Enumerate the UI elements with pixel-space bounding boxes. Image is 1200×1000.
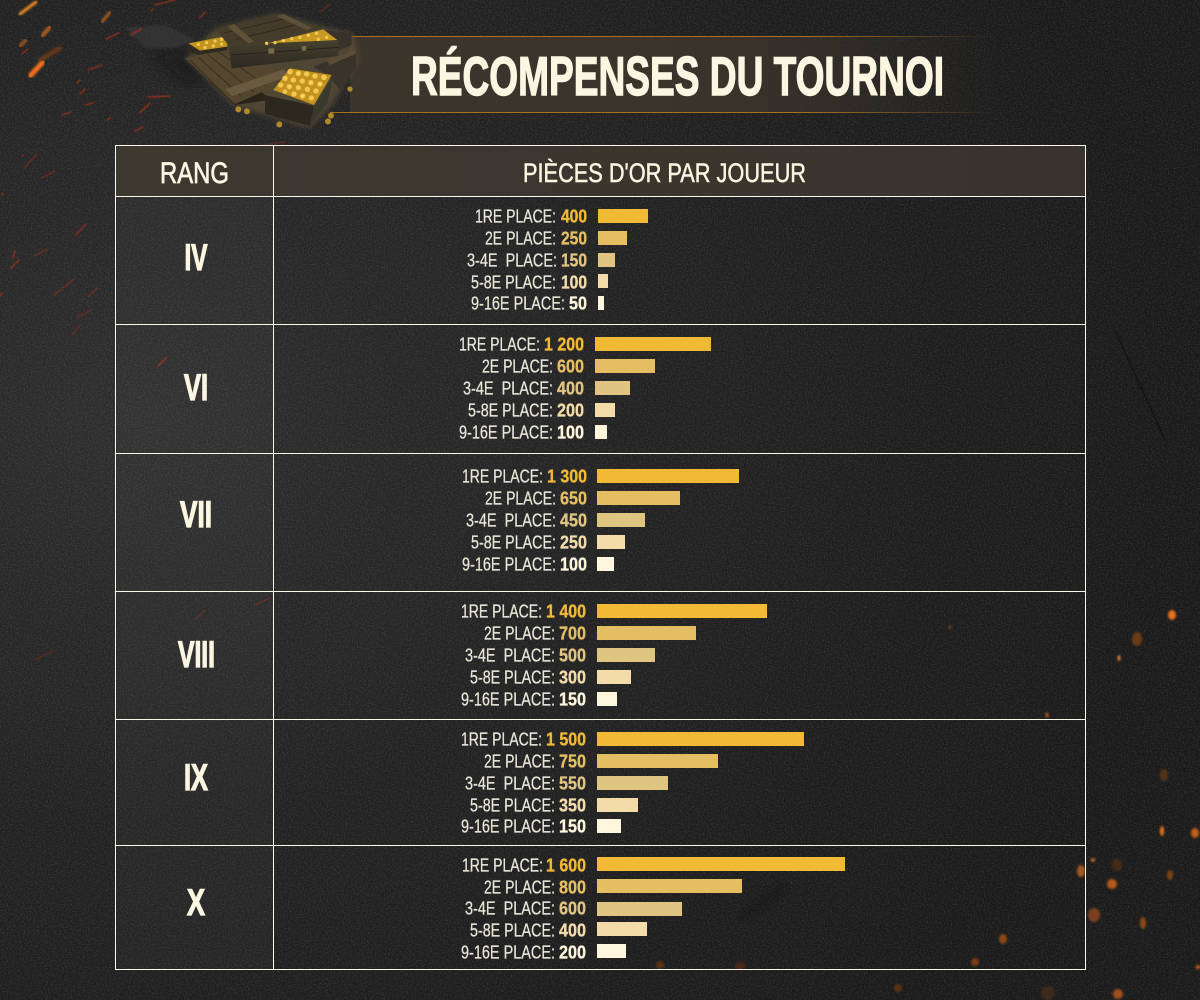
bar chart: rank IV: 150: [561, 250, 587, 270]
rank IV row: [184, 206, 648, 314]
bar chart: rank IV: [467, 206, 648, 314]
bar chart: rank X: 9-16E PLACE:: [461, 942, 555, 962]
bar chart: rank IX: 1 500: [546, 730, 586, 750]
bar chart: rank VIII: 300: [559, 668, 586, 688]
bar chart: rank IX: 2E PLACE:: [484, 752, 555, 772]
rank label X: X: [187, 882, 205, 923]
bar chart: rank X: 5-8E PLACE:: [470, 920, 555, 940]
rank VII row: [180, 466, 739, 574]
bar chart: rank VII: 9-16E PLACE:: [462, 554, 556, 574]
bar chart: rank VII: 3-4E PLACE:: [466, 510, 556, 530]
bar chart: rank IX: [461, 730, 804, 836]
heading: rank column: RANG: [160, 157, 229, 190]
bar chart: rank VIII: 3-4E PLACE:: [465, 646, 555, 666]
bar chart: rank VI: 1RE PLACE:: [459, 334, 540, 354]
bar chart: rank IX: 750: [559, 752, 586, 772]
bar chart: rank VII: 5-8E PLACE:: [471, 532, 556, 552]
bar chart: rank VI: 1 200: [544, 334, 584, 354]
rank VI row: [184, 334, 711, 442]
bar chart: rank VI: 2E PLACE:: [482, 356, 553, 376]
bar chart: rank X: 200: [559, 942, 586, 962]
bar chart: rank VII: 100: [560, 554, 587, 574]
title: RÉCOMPENSES DU TOURNOI: [411, 45, 944, 107]
title banner: [330, 36, 1000, 113]
bar chart: rank VIII: 9-16E PLACE:: [461, 690, 555, 710]
rank column shading: [117, 197, 273, 969]
rank IX row: [184, 730, 804, 836]
bar chart: rank X: 1 600: [546, 856, 586, 876]
bar chart: rank IV: 2E PLACE:: [485, 228, 556, 248]
bar chart: rank IV: 9-16E PLACE:: [471, 294, 565, 314]
bar chart: rank VIII: 500: [559, 646, 586, 666]
table grid lines: [116, 146, 1086, 970]
bar chart: rank IX: 3-4E PLACE:: [465, 774, 555, 794]
rank VIII row: [178, 602, 767, 710]
bar chart: rank VIII: 700: [559, 624, 586, 644]
red and orange sparks, upper left: [0, 0, 330, 660]
bar chart: rank VII: 1 300: [547, 466, 587, 486]
bar chart: rank VI: 3-4E PLACE:: [463, 378, 553, 398]
heading: gold per player column: PIÈCES D'OR PAR JOUEUR: [523, 158, 806, 188]
bar chart: rank VIII: 1 400: [546, 602, 586, 622]
bar chart: rank IV: 50: [569, 294, 587, 314]
table: rewards by rank: [116, 146, 1086, 970]
bar chart: rank IV: 400: [561, 206, 587, 226]
bar chart: rank VIII: 150: [559, 690, 586, 710]
rank label IX: IX: [184, 757, 208, 798]
bar chart: rank IV: 5-8E PLACE:: [471, 272, 556, 292]
bar chart: rank VI: 200: [557, 400, 584, 420]
bar chart: rank VIII: 1RE PLACE:: [461, 602, 542, 622]
bar chart: rank X: 2E PLACE:: [484, 878, 555, 898]
bar chart: rank IV: 1RE PLACE:: [475, 206, 556, 226]
bar chart: rank X: 600: [559, 898, 586, 918]
bar chart: rank IV: 3-4E PLACE:: [467, 250, 557, 270]
glowing embers, lower right: [656, 610, 1200, 1000]
icon: wooden crates full of gold coins: [185, 13, 358, 128]
rank label VI: VI: [184, 367, 208, 408]
bar chart: rank X: 3-4E PLACE:: [465, 898, 555, 918]
bar chart: rank VI: [459, 334, 711, 442]
header row: [116, 146, 1085, 196]
bar chart: rank X: [461, 856, 845, 962]
bar chart: rank IV: 250: [561, 228, 587, 248]
bar chart: rank VI: 600: [557, 356, 584, 376]
bar chart: rank X: 800: [559, 878, 586, 898]
bar chart: rank VIII: [461, 602, 767, 710]
rank X row: [187, 856, 845, 962]
rank label VII: VII: [180, 494, 212, 535]
bar chart: rank IX: 5-8E PLACE:: [470, 796, 555, 816]
bar chart: rank VII: 650: [560, 488, 587, 508]
bar chart: rank IX: 9-16E PLACE:: [461, 816, 555, 836]
bar chart: rank VII: [462, 466, 739, 574]
rank label IV: IV: [184, 237, 208, 278]
bar chart: rank VI: 400: [557, 378, 584, 398]
bar chart: rank IX: 350: [559, 796, 586, 816]
bar chart: rank VIII: 2E PLACE:: [484, 624, 555, 644]
bar chart: rank IX: 150: [559, 816, 586, 836]
bar chart: rank VII: 1RE PLACE:: [462, 466, 543, 486]
bar chart: rank VII: 450: [560, 510, 587, 530]
bar chart: rank VII: 2E PLACE:: [485, 488, 556, 508]
bar chart: rank IX: 1RE PLACE:: [461, 730, 542, 750]
bar chart: rank VIII: 5-8E PLACE:: [470, 668, 555, 688]
bar chart: rank VII: 250: [560, 532, 587, 552]
bar chart: rank IV: 100: [561, 272, 587, 292]
rank label VIII: VIII: [178, 634, 215, 675]
bar chart: rank VI: 5-8E PLACE:: [468, 400, 553, 420]
bar chart: rank X: 1RE PLACE:: [462, 856, 543, 876]
bar chart: rank VI: 100: [557, 422, 584, 442]
bar chart: rank X: 400: [559, 920, 586, 940]
bar chart: rank IX: 550: [559, 774, 586, 794]
bar chart: rank VI: 9-16E PLACE:: [459, 422, 553, 442]
